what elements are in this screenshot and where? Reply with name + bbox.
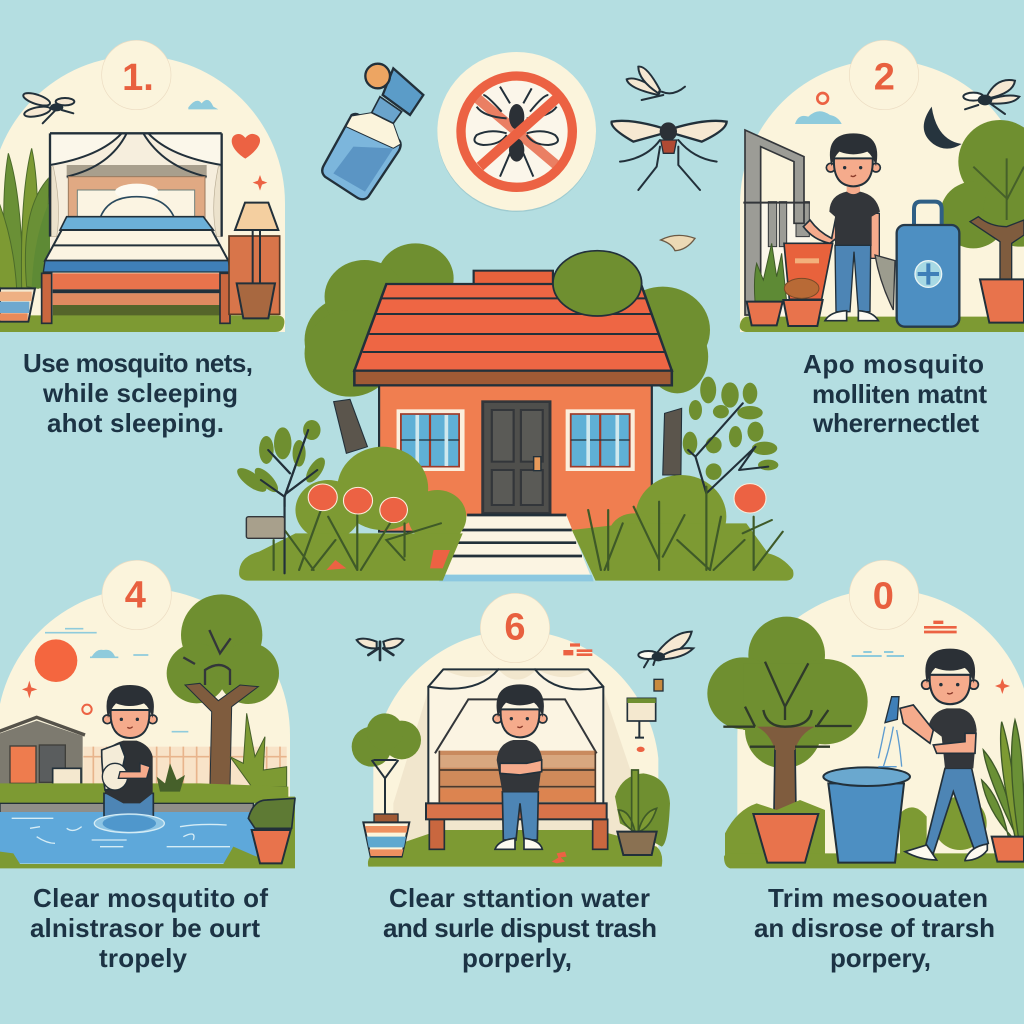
- icon: heart: [232, 134, 260, 159]
- sparkle: [995, 678, 1010, 694]
- moon: [924, 107, 962, 149]
- text: step 1: [23, 348, 253, 438]
- red dot: [637, 747, 645, 752]
- left potted tree: [352, 713, 421, 857]
- net frame: [428, 669, 603, 803]
- steps: [442, 515, 590, 574]
- text: step 0: an disrose of trarsh: [754, 913, 995, 943]
- left bush and ground: [239, 447, 466, 581]
- water: [0, 812, 257, 863]
- panel: step 1 bed with net: [0, 40, 285, 332]
- background trees: [305, 243, 710, 397]
- right window: [566, 409, 635, 471]
- text: step 4: [30, 883, 268, 973]
- small orange accents: [326, 550, 450, 570]
- roof: [354, 271, 672, 385]
- grass: [740, 317, 1024, 332]
- text: step 6: and surle dispust trash: [383, 913, 657, 943]
- grass: [368, 830, 662, 867]
- nightstand: [229, 236, 280, 314]
- number 4: 4: [125, 575, 146, 617]
- text: step 1: Use mosquito nets,: [23, 348, 253, 378]
- small lantern: [654, 679, 663, 691]
- lamp: [235, 203, 278, 318]
- mosquito: [963, 80, 1019, 114]
- number 1: 1.: [122, 57, 154, 99]
- right pot: [992, 837, 1024, 862]
- person: [493, 684, 547, 849]
- net fabric: [393, 690, 642, 850]
- ground pad: [439, 575, 594, 581]
- red bricks: [924, 621, 957, 633]
- lawn: [0, 783, 288, 803]
- headboard: [68, 177, 205, 218]
- tree: [707, 617, 868, 812]
- icon: sparkle: [253, 175, 267, 191]
- panel: central house: [233, 243, 793, 581]
- left window: [397, 409, 465, 471]
- potted plant: [248, 798, 295, 863]
- small cloud: [92, 650, 115, 657]
- text: step 2: wherernectlet: [812, 408, 979, 438]
- wall: [379, 385, 652, 532]
- number badge: [849, 560, 919, 630]
- text: step 2: [803, 349, 987, 438]
- right pot front: [980, 279, 1024, 323]
- icon: no mosquito sign: [437, 52, 596, 212]
- thin clouds: [852, 652, 904, 656]
- number badge: [102, 40, 171, 110]
- bench: [439, 751, 595, 802]
- panel: step 0 person watering: [707, 560, 1024, 868]
- sign: [627, 698, 656, 738]
- right bush and ground: [572, 475, 793, 581]
- icon: small mosquito: [627, 67, 685, 100]
- person: [900, 649, 988, 861]
- cream arch backdrop: [0, 588, 290, 803]
- grass: [0, 315, 284, 332]
- bed posts: [42, 273, 230, 323]
- water spray: [878, 727, 902, 767]
- red bucket: [784, 243, 833, 299]
- tool: [875, 255, 895, 310]
- blue bucket: [823, 767, 910, 863]
- pool rim: [0, 803, 253, 813]
- number badge: [102, 560, 171, 630]
- shed: [0, 717, 85, 791]
- roof bush: [553, 251, 642, 316]
- spiky plant: [230, 713, 287, 787]
- text: step 4: tropely: [99, 943, 188, 973]
- icon: repellent bottle: [322, 64, 423, 199]
- left flowering branch: [233, 420, 329, 573]
- text: step 0: porpery,: [830, 943, 931, 973]
- number 6: 6: [504, 606, 526, 648]
- tree: [940, 120, 1024, 280]
- orange pebbles: [552, 852, 567, 863]
- clouds and thin lines: [45, 629, 188, 732]
- text: step 6: Clear sttantion water: [389, 883, 650, 913]
- icon: tiny bug: [661, 235, 695, 251]
- pot left: [0, 288, 35, 322]
- ripples: [12, 818, 230, 847]
- sparkle: [22, 681, 37, 698]
- number 0: 0: [873, 575, 894, 617]
- fence: [83, 747, 287, 787]
- text: step 2: molliten matnt: [812, 379, 987, 409]
- right plant: [982, 720, 1024, 837]
- sprayer: [885, 697, 899, 723]
- sign: [246, 517, 285, 538]
- red bricks: [563, 643, 592, 656]
- number badge: [849, 40, 919, 110]
- small plant: [754, 243, 787, 302]
- text: step 0: [754, 883, 995, 973]
- icon: cloud: [188, 100, 218, 109]
- panel: step 2 person with suitcase: [740, 40, 1024, 332]
- left flower stems and grass: [274, 510, 441, 570]
- trunks: [334, 399, 682, 475]
- person: [803, 133, 880, 321]
- tree: [167, 594, 279, 787]
- text: step 0: Trim mesoouaten: [768, 883, 988, 913]
- right leafy branch: [683, 377, 778, 493]
- number badge: [480, 593, 550, 663]
- right plant: [615, 770, 670, 855]
- ring: [82, 705, 92, 714]
- text: step 4: Clear mosqutito of: [33, 883, 268, 913]
- cream arch backdrop: [0, 56, 285, 332]
- bed: [43, 217, 230, 317]
- door: [483, 402, 550, 513]
- text: step 2: Apo mosquito: [803, 349, 984, 379]
- cream arch backdrop: [740, 60, 1024, 332]
- pot: [753, 814, 818, 863]
- plant: [0, 148, 50, 288]
- pillows: [98, 184, 177, 225]
- water edge grass: [0, 797, 295, 868]
- flowers: [308, 484, 766, 523]
- cream arch backdrop: [737, 589, 1024, 857]
- person: [94, 685, 164, 833]
- ring icon: [817, 93, 828, 104]
- panel: step 6 person on bench: [352, 593, 693, 867]
- right grass blades: [588, 487, 783, 570]
- bushes and ground: [724, 797, 1024, 868]
- text: step 4: alnistrasor be ourt: [30, 913, 260, 943]
- cream arch backdrop: [373, 630, 658, 867]
- number 2: 2: [874, 56, 895, 98]
- text: step 6: [383, 883, 657, 973]
- small pots: [747, 300, 823, 326]
- gate: [743, 130, 810, 315]
- cloud: [795, 111, 842, 124]
- text: step 6: porperly,: [462, 943, 572, 973]
- panel: top centre no-mosquito icons: [322, 52, 727, 251]
- mosquito right: [638, 632, 693, 667]
- panel: step 4 person in water: [0, 560, 295, 868]
- icon: mosquito: [22, 91, 74, 123]
- text: step 1: while scleeping: [42, 378, 238, 408]
- icon: large mosquito: [612, 121, 727, 190]
- blue suitcase: [897, 202, 959, 327]
- bed canopy: [50, 133, 222, 267]
- bench seat and legs: [426, 803, 608, 849]
- text: step 1: ahot sleeping.: [47, 408, 224, 438]
- red sun: [35, 639, 77, 682]
- mosquito left: [357, 639, 403, 660]
- lawn plant: [157, 763, 185, 792]
